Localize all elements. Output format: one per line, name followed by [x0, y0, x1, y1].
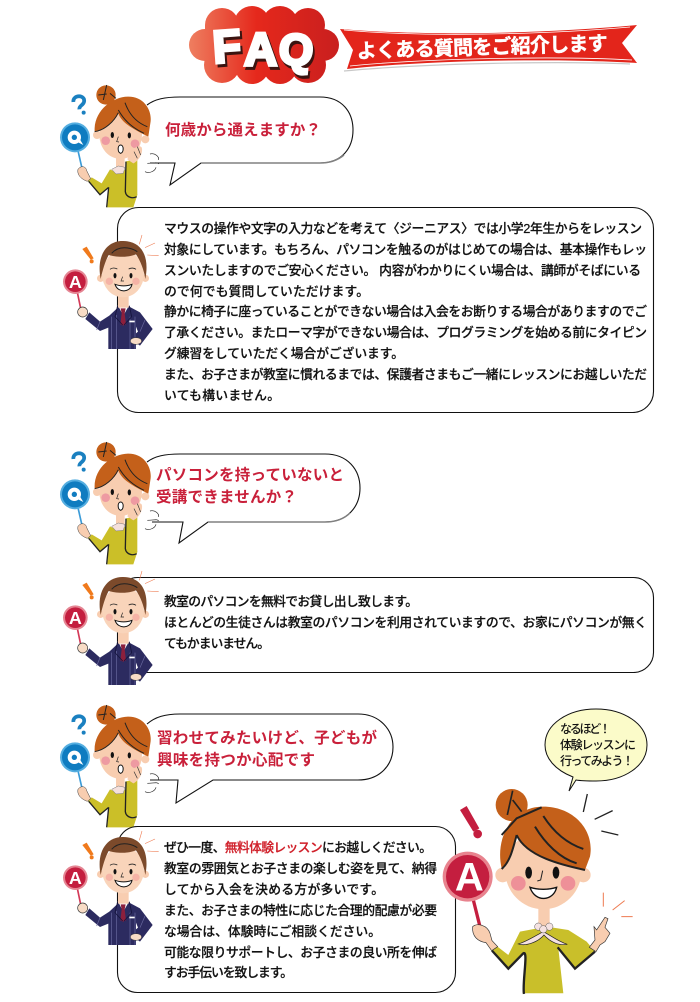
girl with Q paddle 2	[60, 442, 159, 564]
speech bubble: naruhodo: 行ってみよう！	[560, 754, 634, 768]
answer box 1	[118, 208, 654, 412]
question balloon 3: 習わせてみたいけど、子どもが	[157, 728, 377, 747]
boy with A paddle 2	[63, 571, 159, 685]
girl with Q paddle 3	[60, 705, 159, 827]
speech bubble: naruhodo: なるほど！	[560, 722, 611, 736]
question balloon 2: 受講できませんか？	[156, 487, 297, 506]
answer text 1: また、お子さまが教室に慣れるまでは、保護者さまもご一緒にレッスンにお越しいただ	[164, 367, 647, 382]
question balloon 1	[147, 97, 353, 185]
body	[492, 927, 595, 993]
large girl with A paddle	[443, 789, 633, 994]
answer box 3	[118, 826, 456, 992]
A paddle: A	[455, 856, 484, 900]
answer text 2: 教室のパソコンを無料でお貸し出し致します。	[164, 594, 418, 609]
motion lines	[583, 794, 618, 835]
boy with A paddle 1	[63, 235, 159, 349]
answer text 3: ぜひ一度、無料体験レッスンにお越しください。	[164, 840, 432, 855]
answer text 1: 対象にしています。もちろん、パソコンを触るのがはじめての場合は、基本操作もレッ	[164, 242, 647, 257]
ribbon banner	[340, 25, 637, 71]
speech bubble: naruhodo: 体験レッスンに	[560, 737, 636, 752]
FAQ 1	[60, 85, 653, 412]
question balloon 3	[147, 714, 393, 803]
question balloon 2	[147, 454, 360, 543]
answer text 1: マウスの操作や文字の入力などを考えて〈ジーニアス〉では小学2年生からをレッスン	[164, 221, 642, 236]
girl with Q paddle 1	[60, 85, 159, 207]
FAQ lettering: A	[244, 23, 277, 75]
answer text 3: すお手伝いを致します。	[164, 965, 293, 980]
answer text 3: してから入会を決める方が多いです。	[164, 882, 384, 897]
answer text 2: ほとんどの生徒さんは教室のパソコンを利用されていますので、お家にパソコンが無く	[164, 615, 647, 630]
FAQ lettering: Q	[279, 28, 317, 79]
answer text 1: 了承ください。またローマ字ができない場合は、プログラミングを始める前にタイピン	[164, 325, 647, 340]
answer text 1: ので何でも質問していただけます。	[164, 284, 369, 299]
FAQ lettering: Q	[277, 24, 315, 76]
question balloon 2: パソコンを持っていないと	[156, 466, 344, 484]
exclamation mark	[460, 806, 482, 838]
answer text 3	[164, 840, 437, 980]
answer text 2	[164, 594, 647, 651]
question balloon 3: 興味を持つか心配です	[157, 751, 315, 769]
answer text 1: 静かに椅子に座っていることができない場合は入会をお断りする場合がありますのでご	[164, 304, 647, 319]
FAQ 2	[60, 442, 653, 685]
FAQ lettering	[211, 19, 317, 79]
answer text 3: また、お子さまの特性に応じた合理的配慮が必要	[164, 903, 437, 918]
ribbon banner: よくある質問をご紹介します	[356, 31, 608, 63]
sparkle lines	[603, 893, 633, 917]
answer text 1: スンいたしますのでご安心ください。 内容がわかりにくい場合は、講師がそばにいる	[164, 263, 641, 278]
answer text 1: グ練習をしていただく場合がございます。	[164, 346, 404, 361]
answer text 1: いても構いません。	[164, 388, 280, 403]
FAQ lettering: A	[246, 26, 279, 78]
FAQ lettering: F	[213, 22, 245, 76]
header: FAQ title	[189, 6, 637, 84]
speech bubble: naruhodo	[545, 709, 647, 791]
answer text 3: 教室の雰囲気とお子さまの楽しむ姿を見て、納得	[164, 861, 437, 876]
A paddle	[443, 852, 493, 927]
answer text 3: 可能な限りサポートし、お子さまの良い所を伸ば	[164, 945, 437, 960]
answer text 3: な場合は、体験時にご相談ください。	[164, 924, 381, 939]
FAQ 3	[60, 705, 456, 992]
FAQ lettering: F	[211, 19, 243, 73]
answer text 1	[164, 221, 647, 403]
answer box 2	[118, 578, 654, 672]
boy with A paddle 3	[63, 831, 159, 945]
answer text 2: てもかまいません。	[164, 636, 270, 651]
cloud badge	[189, 6, 339, 84]
head	[495, 789, 591, 909]
question balloon 1: 何歳から通えますか？	[165, 120, 321, 139]
